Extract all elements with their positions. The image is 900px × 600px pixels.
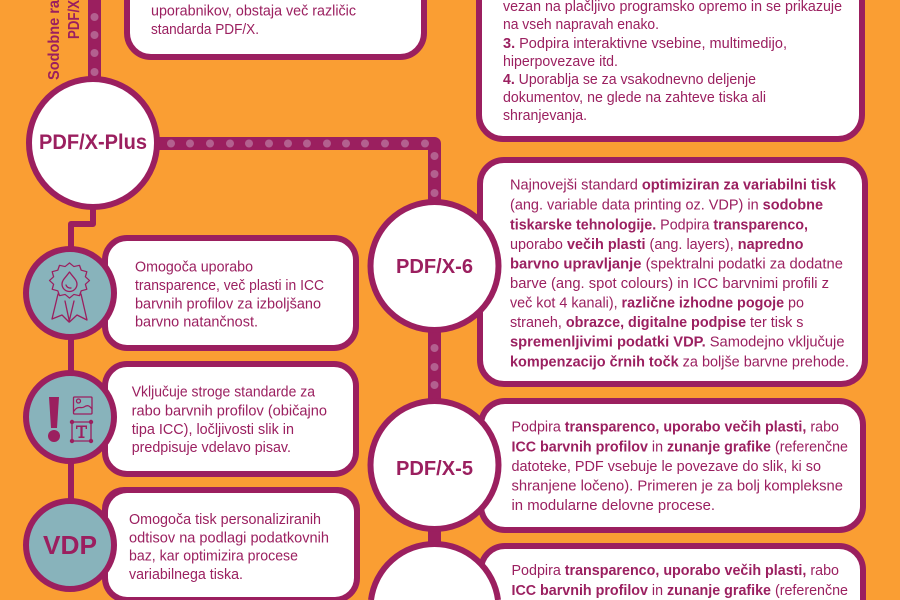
panel: PDF/X intro text (top): uporabnikov, obstaja več različic — [151, 4, 356, 20]
panel: VDP feature: variabilnega tiska. — [129, 567, 243, 583]
panel: PDF properties (top right): hiperpovezave itd. — [503, 54, 618, 70]
panel: PDF/X-5 description: datoteke, PDF vsebuje le povezave do slik, ki so — [512, 459, 821, 475]
circle: PDF/X-Plus: PDF/X-Plus — [39, 131, 147, 154]
circle: PDF/X-5: PDF/X-5 — [396, 457, 473, 480]
circle: next standard (cut off) — [371, 544, 498, 600]
circle: PDF/X-Plus — [29, 79, 157, 207]
panel: PDF properties (top right): na vseh napravah enako. — [503, 17, 659, 33]
panel: next standard description (cut off): Podpira transparenco, uporabo večih plasti, rabo — [512, 563, 839, 579]
panel: PDF/X-6 description: uporabo večih plasti (ang. layers), napredno — [510, 237, 804, 253]
panel: PDF/X-6 description: več kot 4 kanali), različne izhodne pogoje po — [510, 296, 804, 312]
circle: VDP — [26, 501, 114, 589]
panel: strict profile rules feature: tipa ICC), ločljivosti slik in — [132, 422, 294, 438]
panel: PDF/X-6 description: straneh, obrazce, digitalne podpise ter tisk s — [510, 315, 803, 331]
panel: PDF/X-6 description: barve (ang. spot colours) in ICC barvnimi profili z — [510, 276, 829, 292]
panel: PDF/X-6 description: barvno upravljanje (spektralni podatki za dodatne — [510, 256, 843, 272]
panel: colour management feature: barvnih profilov za izboljšano — [135, 296, 321, 312]
panel: PDF properties (top right): dokumentov, ne glede na zahteve tiska ali — [503, 90, 766, 106]
panel: PDF properties (top right) — [479, 0, 862, 139]
panel: next standard description (cut off): ICC barvnih profilov in zunanje grafike (referenčne — [512, 583, 848, 599]
panel: VDP feature: baz, kar optimizira procese — [129, 549, 298, 565]
circle: PDF/X-5 — [370, 401, 498, 529]
panel: PDF/X-6 description: kompenzacijo črnih točk za boljše barvne prehode. — [510, 354, 849, 370]
panel: PDF/X-6 description: spremenljivimi podatki VDP. Samodejno vključuje — [510, 335, 845, 351]
connector: PDF/X-Plus to feature circles — [71, 200, 93, 560]
panel: next standard description (cut off) — [481, 546, 863, 600]
panel: PDF/X-5 description: in modularne delovne procese. — [512, 498, 715, 514]
panel: strict profile rules feature — [105, 364, 356, 474]
panel: colour management feature — [105, 238, 356, 348]
panel: PDF/X intro text (top) — [127, 0, 424, 57]
dotted connector: PDF/X-Plus to PDF/X-6 and onward — [150, 140, 438, 560]
panel: colour management feature: barvno natančnost. — [135, 315, 258, 331]
panel: PDF/X-5 description: shranjene ločeno). Primeren je za bolj kompleksne — [512, 479, 843, 495]
panel: strict profile rules feature: rabo barvnih profilov (običajno — [132, 404, 327, 420]
panel: VDP feature: Omogoča tisk personaliziranih — [129, 512, 321, 528]
panel: PDF/X-6 description: Najnovejši standard optimiziran za variabilni tisk — [510, 177, 837, 193]
panel: colour management feature: Omogoča uporabo — [135, 260, 253, 276]
panel: PDF/X-5 description — [481, 401, 863, 530]
panel: VDP feature: odtisov na podlagi podatkovnih — [129, 531, 329, 547]
circle: PDF/X-6 — [370, 202, 498, 330]
panel: colour management feature: transparence, več plasti in ICC — [135, 278, 324, 294]
icon: warning, image and font in teal circle — [26, 373, 114, 461]
panel: PDF properties (top right): 3. Podpira interaktivne vsebine, multimedijo, — [503, 36, 787, 52]
panel: PDF/X-6 description — [480, 160, 865, 384]
panel: PDF properties (top right): shranjevanja. — [503, 108, 587, 124]
panel: PDF/X-5 description: ICC barvnih profilov in zunanje grafike (referenčne — [512, 440, 848, 456]
panel: PDF properties (top right): 4. Uporablja se za vsakodnevno deljenje — [503, 72, 756, 88]
panel: PDF/X-6 description: (ang. variable data printing oz. VDP) in sodobne — [510, 197, 823, 213]
panel: strict profile rules feature: predpisuje vdelavo pisav. — [132, 440, 291, 456]
circle: PDF/X-6: PDF/X-6 — [396, 255, 473, 278]
panel: VDP feature — [102, 487, 360, 600]
dotted connector: top spine to PDF/X-Plus — [90, 0, 98, 85]
panel: strict profile rules feature: Vključuje stroge standarde za — [132, 385, 316, 401]
panel: PDF/X intro text (top): standarda PDF/X. — [151, 22, 259, 38]
panel: PDF/X-6 description: tiskarske tehnologije. Podpira transparenco, — [510, 217, 808, 233]
panel: PDF/X-5 description: Podpira transparenco, uporabo večih plasti, rabo — [512, 420, 839, 436]
rotated section heading — [46, 0, 83, 80]
circle: VDP: VDP — [43, 530, 97, 560]
icon: colour quality seal in teal circle — [26, 249, 114, 337]
